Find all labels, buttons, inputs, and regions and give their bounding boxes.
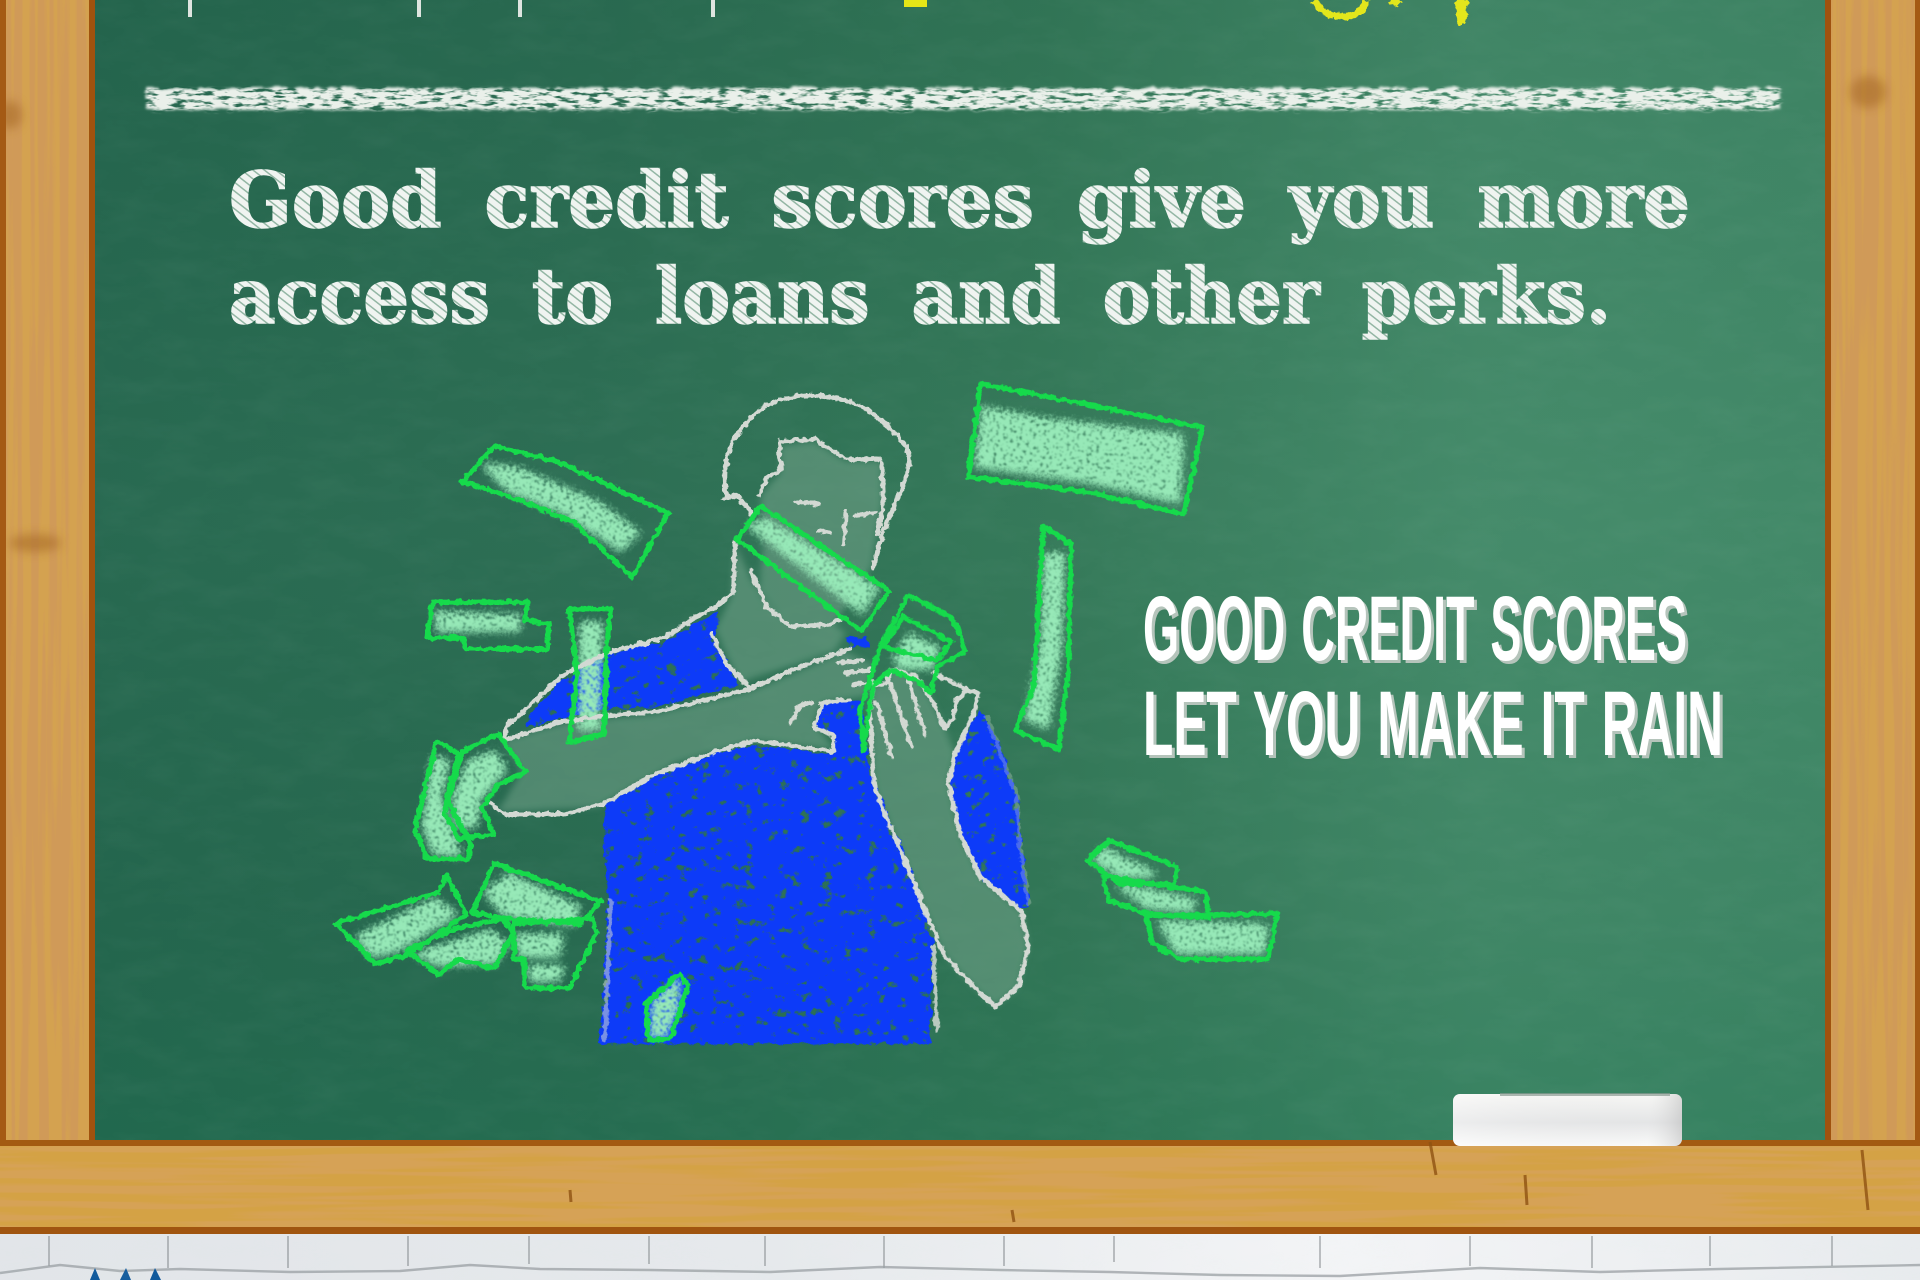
figure skin shading xyxy=(498,441,1028,1007)
blue logo peaks xyxy=(90,1268,161,1280)
right wood post xyxy=(1825,0,1920,1142)
chalk outlines of the man xyxy=(490,396,1028,1040)
heading: good credit scores xyxy=(229,156,1690,342)
heading: good credit scores: access to loans and other perks. xyxy=(229,252,1611,342)
bill fills xyxy=(360,410,1265,1035)
chalk figure making it rain xyxy=(336,384,1277,1044)
chalk divider line xyxy=(146,88,1781,110)
left wood post xyxy=(0,0,95,1142)
callout: make it rain xyxy=(1143,578,1723,775)
brick wall xyxy=(0,1230,1920,1280)
chalk eraser xyxy=(1453,1093,1682,1146)
bottom wood ledge xyxy=(0,1140,1920,1234)
clipped headline remnants xyxy=(190,0,1465,24)
blue chalk shirt xyxy=(528,611,1028,1044)
heading: good credit scores: Good credit scores give you more xyxy=(229,156,1690,246)
flying dollar bill outlines xyxy=(336,384,1277,1040)
